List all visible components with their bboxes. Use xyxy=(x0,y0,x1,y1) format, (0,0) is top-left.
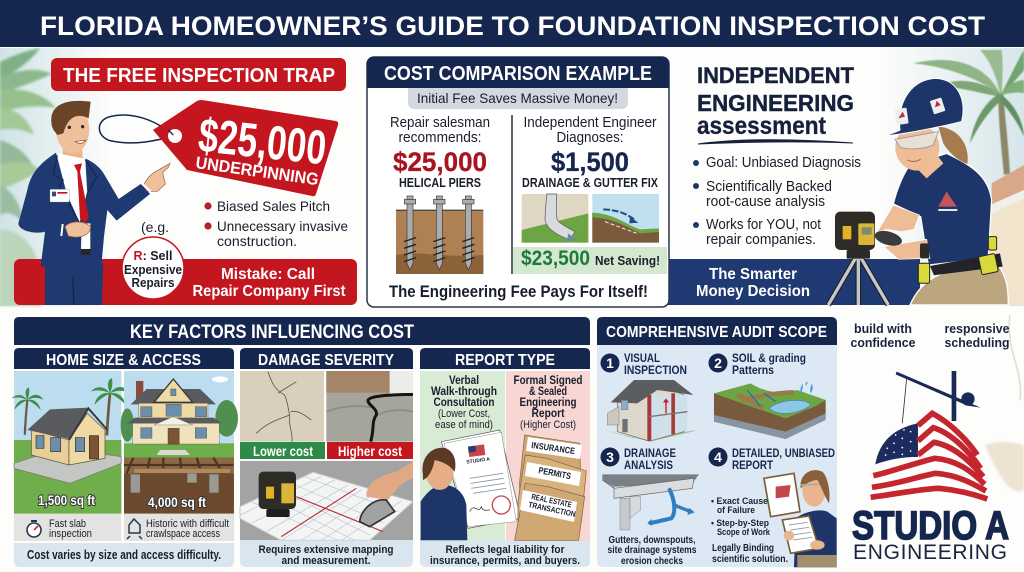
column: repair salesman: HELICAL PIERS xyxy=(399,175,481,190)
bullets: sales pitch drawbacks xyxy=(204,198,348,249)
text: e.g.: (e.g. xyxy=(141,219,169,235)
note: requires mapping: Requires extensive mapping xyxy=(258,544,394,556)
step 4: detailed unbiased report: 4 xyxy=(714,449,722,465)
illustration: mapping grid with level and hand xyxy=(240,461,413,540)
badge: sell expensive repairs xyxy=(122,237,184,299)
column: home size and access xyxy=(11,348,238,567)
column: repair salesman: recommends: xyxy=(398,130,482,146)
step 2: soil and grading: SOIL & grading xyxy=(732,351,806,365)
label: higher cost: Higher cost xyxy=(338,444,402,459)
note: legal liability: Reflects legal liability for xyxy=(446,544,565,556)
step 2: soil and grading xyxy=(708,351,826,439)
caption: fast slab inspection: Fast slab xyxy=(49,518,86,530)
column: report type xyxy=(420,348,590,567)
text: formal signed and sealed: Report xyxy=(532,408,565,420)
tagline: fee pays for itself: The Engineering Fee Pays For Itself! xyxy=(389,282,648,301)
illustration: hairline and severe cracks xyxy=(240,371,413,442)
text: legally binding: Legally Binding xyxy=(712,542,774,554)
bullets: report contents: • Exact Cause xyxy=(711,496,768,507)
text: formal signed and sealed: Formal Signed xyxy=(514,375,582,387)
illustration: salesman pointing xyxy=(18,101,170,305)
heading: key factors xyxy=(14,317,590,345)
text: verbal walk-through xyxy=(431,375,497,431)
tagline: responsive scheduling: responsive xyxy=(944,321,1010,336)
step 3: drainage analysis: ANALYSIS xyxy=(624,458,673,472)
label: 4,000 sq ft: 4,000 sq ft xyxy=(148,494,206,510)
column: damage severity xyxy=(240,348,413,567)
note: requires mapping: and measurement. xyxy=(282,555,370,567)
left background palm tree xyxy=(0,48,56,306)
column: independent engineer: $1,500 xyxy=(551,147,629,177)
label: insurance: INSURANCE xyxy=(531,440,576,456)
caption: fast slab inspection xyxy=(14,514,121,541)
note: legal liability: insurance, permits, and buyers. xyxy=(430,555,580,567)
heading: independent engineering assessment: ENGINEERING xyxy=(697,90,854,116)
step 1: visual inspection: INSPECTION xyxy=(624,363,687,377)
blue banner: smarter money decision xyxy=(660,259,920,305)
illustration: signed report and engineer: STUDIO A xyxy=(466,456,491,466)
text: verbal walk-through: Walk-through xyxy=(431,386,497,398)
caption: fast slab inspection: inspection xyxy=(49,528,92,540)
bullets: engineer benefits: Works for YOU, not xyxy=(706,217,821,233)
title banner: FLORIDA HOMEOWNER’S GUIDE TO FOUNDATION INSPECTION COST xyxy=(40,11,986,41)
note: cost varies: Cost varies by size and access difficulty. xyxy=(27,548,221,562)
wordmark: engineering: ENGINEERING xyxy=(853,541,1007,564)
right background: palm, roof and wall xyxy=(913,50,1024,305)
heading: audit scope: COMPREHENSIVE AUDIT SCOPE xyxy=(606,324,827,341)
tagline: responsive scheduling xyxy=(944,321,1010,350)
illustration: downspout and grading xyxy=(522,194,659,243)
heading: independent engineering assessment xyxy=(697,63,854,144)
step 4: detailed unbiased report: REPORT xyxy=(732,458,774,472)
logo: studio a engineering xyxy=(852,371,1009,564)
subheading: damage severity: DAMAGE SEVERITY xyxy=(258,352,394,369)
subheading: home size and access: HOME SIZE & ACCESS xyxy=(46,352,201,369)
subheading: report type xyxy=(420,348,590,369)
caption: gutters, downspouts: Gutters, downspouts, xyxy=(608,534,696,546)
step 1: visual inspection xyxy=(600,351,699,442)
illustration: engineer with laser level xyxy=(828,78,1008,305)
background: cracked wall texture lower right xyxy=(985,315,1024,491)
bullets: engineer benefits xyxy=(693,155,861,248)
label: real estate transaction: TRANSACTION xyxy=(528,500,577,519)
caption: historic with difficult crawlspace: Historic with difficult xyxy=(146,518,229,530)
bullets: sales pitch drawbacks: Unnecessary invasive xyxy=(217,218,348,234)
subheading pill: Initial Fee Saves Massive Money! xyxy=(417,90,618,106)
illustration: large home with crawlspace xyxy=(121,371,238,514)
heading: free inspection trap: THE FREE INSPECTION TRAP xyxy=(63,64,335,87)
note: requires mapping xyxy=(240,541,413,567)
illustration: helical piers xyxy=(396,196,483,274)
illustration: signed report and engineer xyxy=(421,430,521,540)
heading: key factors: KEY FACTORS INFLUENCING COST xyxy=(130,321,414,343)
label: real estate transaction xyxy=(520,490,577,522)
price tag: $25,000 underpinning: UNDERPINNING xyxy=(194,153,320,189)
illustration: gutter and downspout xyxy=(602,474,699,530)
heading: independent engineering assessment: INDEPENDENT xyxy=(697,63,854,88)
price tag: $25,000 underpinning xyxy=(99,100,338,196)
label: real estate transaction: REAL ESTATE xyxy=(531,492,573,510)
bullets: report contents xyxy=(711,496,771,538)
step 2: soil and grading: Patterns xyxy=(732,363,774,377)
column: repair salesman: Repair salesman xyxy=(390,115,490,131)
step 1: visual inspection: 1 xyxy=(606,355,614,371)
illustration: engineer with clipboard xyxy=(764,470,837,567)
mistake banner: Mistake: Call xyxy=(221,266,315,283)
illustration: small slab home xyxy=(11,371,129,514)
tagline: build with confidence xyxy=(850,321,916,350)
bullets: report contents: Scope of Work xyxy=(717,527,771,538)
step 3: drainage analysis: 3 xyxy=(606,449,614,465)
text: verbal walk-through: Verbal xyxy=(449,375,479,387)
heading: independent engineering assessment: assessment xyxy=(697,112,827,140)
note: legal liability xyxy=(420,541,590,567)
column: repair salesman: $25,000 xyxy=(393,147,487,177)
callout: net saving: $23,500 xyxy=(521,247,590,270)
caption: gutters, downspouts: erosion checks xyxy=(621,555,683,567)
tagline: responsive scheduling: scheduling xyxy=(944,335,1010,350)
text: legally binding: scientific solution. xyxy=(712,553,788,565)
panel: key factors influencing cost xyxy=(11,317,590,567)
label: permits: PERMITS xyxy=(538,465,572,481)
subheading: report type: REPORT TYPE xyxy=(455,352,555,369)
heading: cost comparison: COST COMPARISON EXAMPLE xyxy=(384,63,652,85)
step 4: detailed unbiased report: DETAILED, UNBIASED xyxy=(732,446,835,460)
text: verbal walk-through: ease of mind) xyxy=(435,419,493,431)
bullets: sales pitch drawbacks: construction. xyxy=(217,233,297,249)
heading: free inspection trap xyxy=(51,58,346,91)
step 3: drainage analysis: DRAINAGE xyxy=(624,446,676,460)
badge: sell expensive repairs: Expensive xyxy=(124,263,182,277)
text: verbal walk-through: Consultation xyxy=(434,397,494,409)
mistake banner: Repair Company First xyxy=(192,283,346,300)
heading: audit scope xyxy=(597,317,837,345)
mistake banner xyxy=(14,259,357,305)
caption: gutters, downspouts: site drainage systems xyxy=(608,544,697,556)
caption: historic with difficult crawlspace xyxy=(124,514,234,541)
text: verbal walk-through: (Lower Cost, xyxy=(438,408,490,420)
bullets: engineer benefits: repair companies. xyxy=(706,232,816,248)
callout: net saving xyxy=(513,247,667,274)
text: formal signed and sealed: (Higher Cost) xyxy=(520,419,576,431)
panel: cost comparison example xyxy=(367,57,669,307)
bullets: engineer benefits: root-cause analysis xyxy=(706,194,825,210)
column: independent engineer: DRAINAGE & GUTTER FIX xyxy=(522,175,658,190)
bullets: report contents: • Step-by-Step xyxy=(711,518,769,529)
column: independent engineer: Independent Engineer xyxy=(524,115,657,131)
illustration: soil cross section xyxy=(714,382,826,439)
subheading: home size and access xyxy=(14,348,234,369)
badge: sell expensive repairs: Repairs xyxy=(132,276,175,290)
panel: independent engineering assessment xyxy=(693,63,1008,305)
blue banner: smarter money decision: The Smarter xyxy=(709,266,797,283)
illustration: house cutaway xyxy=(604,380,699,442)
step 3: drainage analysis xyxy=(600,446,699,567)
icon: crane and flag xyxy=(871,371,987,499)
label: 1,500 sq ft: 1,500 sq ft xyxy=(38,492,95,508)
tagline: build with confidence: build with xyxy=(854,321,912,336)
note: cost varies xyxy=(14,543,234,567)
text: formal signed and sealed: Engineering xyxy=(520,397,576,409)
panel: comprehensive audit scope xyxy=(597,317,837,567)
text: legally binding xyxy=(712,542,788,565)
badge: sell expensive repairs: R: Sell xyxy=(134,249,172,263)
heading: cost comparison xyxy=(367,57,669,88)
caption: historic with difficult crawlspace: crawlspace access xyxy=(146,528,220,540)
price tag: $25,000 underpinning: $25,000 xyxy=(196,109,329,175)
column: independent engineer: Diagnoses: xyxy=(556,130,624,146)
text: formal signed and sealed: & Sealed xyxy=(529,386,567,398)
column: repair salesman xyxy=(390,115,490,274)
bullets: sales pitch drawbacks: Biased Sales Pitch xyxy=(217,198,330,214)
illustration: folders xyxy=(515,435,586,540)
bullets: engineer benefits: Scientifically Backed xyxy=(706,179,832,195)
caption: gutters, downspouts xyxy=(608,534,697,567)
tagline: build with confidence: confidence xyxy=(850,335,916,350)
panel: the free inspection trap xyxy=(14,58,357,305)
label: permits xyxy=(525,462,581,486)
label: insurance xyxy=(526,437,582,459)
step 1: visual inspection: VISUAL xyxy=(624,351,660,365)
text: formal signed and sealed xyxy=(514,375,582,431)
callout: net saving: Net Saving! xyxy=(595,253,660,268)
step 2: soil and grading: 2 xyxy=(714,355,722,371)
column: independent engineer xyxy=(522,115,659,243)
step 4: detailed unbiased report xyxy=(708,446,837,567)
title banner xyxy=(0,0,1024,47)
blue banner: smarter money decision: Money Decision xyxy=(696,283,810,300)
label: lower cost: Lower cost xyxy=(253,444,313,459)
bullets: engineer benefits: Goal: Unbiased Diagnosis xyxy=(706,155,861,171)
bullets: report contents: of Failure xyxy=(717,505,755,516)
